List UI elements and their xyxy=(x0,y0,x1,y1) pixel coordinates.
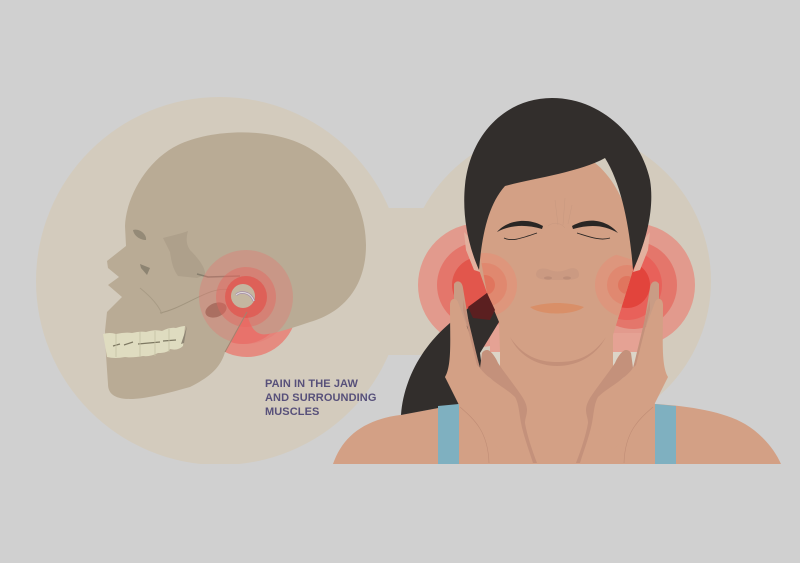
large pain rings behind the head xyxy=(418,223,695,372)
jaw joint disc xyxy=(236,293,254,301)
jaw neck over rings xyxy=(225,312,247,352)
right eyebrow xyxy=(572,221,618,233)
skull illustration xyxy=(103,132,366,399)
caption xyxy=(265,378,376,418)
left closed eye xyxy=(504,233,537,240)
dark jaw hollow xyxy=(203,300,229,320)
ear strip, left xyxy=(464,232,480,272)
hair xyxy=(464,98,651,270)
caption: MUSCLES xyxy=(265,406,319,418)
left eyebrow xyxy=(497,221,543,232)
right hand xyxy=(576,281,668,463)
nasal cavity xyxy=(140,264,150,275)
woman illustration xyxy=(333,98,781,464)
shoulders and torso xyxy=(333,352,781,464)
dark pain patch on hair xyxy=(468,293,495,320)
cheekbone xyxy=(163,231,205,278)
left hand xyxy=(445,281,537,463)
right strap xyxy=(655,404,676,464)
nose xyxy=(536,268,579,280)
jawline crease xyxy=(510,337,606,366)
teeth xyxy=(103,326,187,358)
right closed eye xyxy=(577,233,610,239)
panel: beige backdrop circles xyxy=(36,97,711,465)
caption: PAIN IN THE JAW xyxy=(265,378,358,390)
eye socket xyxy=(133,230,146,240)
skull shape xyxy=(105,132,366,399)
small pain ring, right xyxy=(595,255,633,316)
ponytail xyxy=(401,293,499,415)
lips xyxy=(530,303,584,314)
small pain ring, left xyxy=(480,253,517,315)
pain rings on jaw xyxy=(199,250,293,352)
caption: AND SURROUNDING xyxy=(265,392,376,404)
red pain glow behind jaw xyxy=(197,257,297,357)
ear canal line xyxy=(197,274,240,277)
face and neck xyxy=(478,150,634,390)
forehead wrinkles xyxy=(548,198,572,228)
left strap xyxy=(438,404,459,464)
ear strip, right xyxy=(633,232,650,272)
jaw joint line xyxy=(160,289,230,313)
